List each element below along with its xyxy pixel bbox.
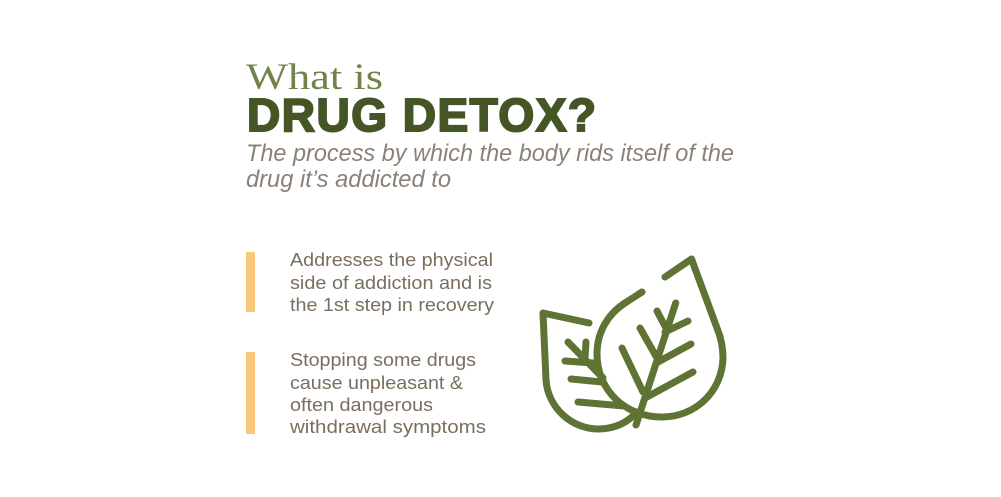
accent bar <box>246 352 255 434</box>
fact text: Addresses the physical <box>290 250 493 270</box>
fact text <box>289 350 486 437</box>
panel: first fact <box>246 250 494 315</box>
heading: Drug Detox: DRUG DETOX? <box>247 89 596 141</box>
accent bar <box>246 252 255 312</box>
panel: second fact <box>246 350 486 437</box>
fact text: cause unpleasant & <box>290 373 463 393</box>
fact text: withdrawal symptoms <box>289 417 486 437</box>
fact text: side of addiction and is <box>290 273 492 293</box>
subtitle text block: drug it’s addicted to <box>246 166 451 193</box>
fact text <box>290 250 494 315</box>
fact text: often dangerous <box>290 395 433 415</box>
icon: two leaves <box>543 259 723 429</box>
fact text: Stopping some drugs <box>290 350 476 370</box>
left leaf <box>543 313 637 429</box>
right leaf <box>597 259 723 425</box>
title <box>246 57 596 141</box>
subtitle text block: The process by which the body rids itself of the <box>246 140 734 167</box>
fact text: the 1st step in recovery <box>290 295 494 315</box>
subtitle text block <box>246 140 734 193</box>
heading: What is: What is <box>246 57 383 98</box>
